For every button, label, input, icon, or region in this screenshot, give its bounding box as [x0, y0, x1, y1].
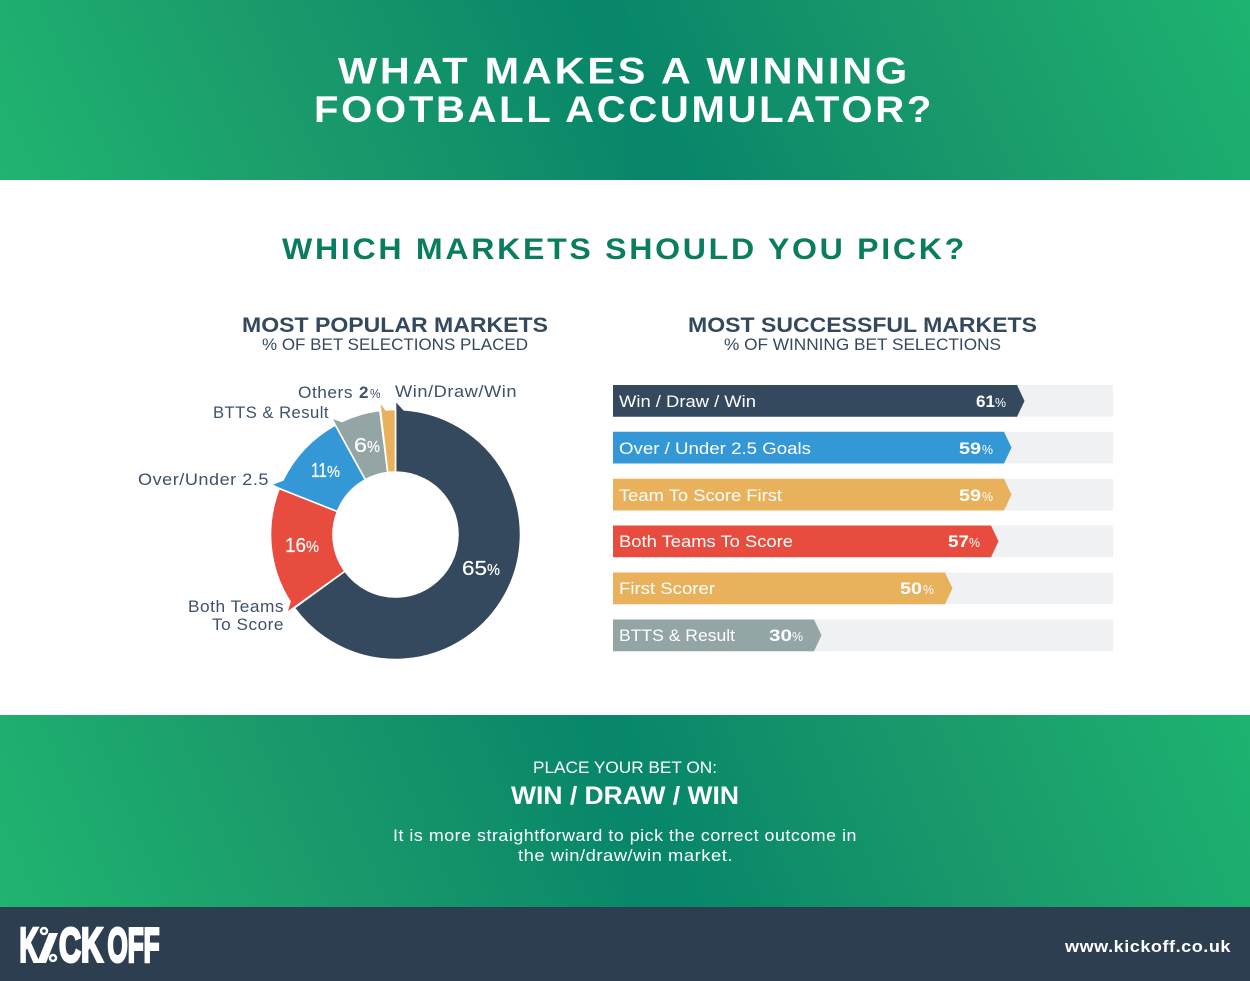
donut values: % — [306, 539, 319, 556]
donut heading — [242, 313, 548, 354]
bar: btts and result: 30 — [769, 626, 792, 645]
logo: K — [20, 920, 39, 972]
donut values: 16 — [285, 535, 306, 557]
bar: win draw win: % — [995, 395, 1006, 410]
bar: btts and result: % — [792, 629, 803, 644]
bars heading — [688, 313, 1037, 354]
recommendation text: PLACE YOUR BET ON: — [533, 758, 717, 777]
donut chart — [271, 400, 521, 660]
donut values: % — [487, 562, 500, 579]
bar: team to score first: % — [982, 489, 993, 504]
donut labels — [138, 382, 517, 634]
bar: first scorer: % — [923, 582, 934, 597]
recommendation text: It is more straightforward to pick the correct outcome in — [393, 826, 857, 845]
donut labels: Both Teams — [188, 597, 284, 616]
bars heading: MOST SUCCESSFUL MARKETS — [688, 313, 1037, 337]
bar: both teams to score: Both Teams To Score — [619, 532, 793, 551]
donut values: 65 — [462, 558, 487, 580]
bar: first scorer — [613, 572, 1113, 604]
donut labels: % — [370, 386, 381, 401]
bar: win draw win — [613, 385, 1113, 417]
donut heading: % OF BET SELECTIONS PLACED — [262, 335, 528, 354]
donut values: % — [367, 439, 380, 456]
website url: www.kickoff.co.uk — [1064, 937, 1231, 956]
title — [314, 50, 934, 130]
bar: both teams to score: 57 — [948, 532, 969, 551]
donut labels: To Score — [212, 615, 284, 634]
bar: over under: Over / Under 2.5 Goals — [619, 439, 811, 458]
bar: btts and result — [613, 620, 1113, 651]
header banner — [0, 0, 1250, 180]
panel: most successful markets — [613, 313, 1113, 651]
bar: over under: % — [982, 442, 993, 457]
donut labels: 2 — [359, 383, 369, 402]
bar: first scorer: First Scorer — [619, 579, 715, 598]
panel: most popular markets — [138, 313, 548, 660]
logo: OFF — [108, 920, 160, 972]
bar: team to score first — [613, 479, 1113, 510]
bar: team to score first: Team To Score First — [619, 486, 782, 505]
logo: CK — [59, 920, 103, 972]
donut labels: Win/Draw/Win — [395, 382, 517, 401]
bar: both teams to score — [613, 526, 1113, 557]
bar: first scorer: 50 — [900, 579, 922, 598]
donut values: % — [327, 464, 340, 481]
recommendation text: WIN / DRAW / WIN — [511, 782, 739, 810]
donut labels: Over/Under 2.5 — [138, 470, 269, 489]
donut values: 11 — [311, 460, 327, 482]
recommendation text: the win/draw/win market. — [518, 846, 733, 865]
logo — [20, 920, 160, 972]
recommendation banner — [0, 715, 1250, 907]
donut values: 6 — [354, 435, 367, 457]
footer bar — [0, 907, 1250, 981]
bar: win draw win: Win / Draw / Win — [619, 392, 756, 411]
donut heading: MOST POPULAR MARKETS — [242, 313, 548, 337]
bar: team to score first: 59 — [959, 486, 981, 505]
bar: over under — [613, 432, 1113, 464]
section heading: WHICH MARKETS SHOULD YOU PICK? — [282, 233, 967, 266]
recommendation text — [393, 758, 857, 865]
bars heading: % OF WINNING BET SELECTIONS — [724, 335, 1001, 354]
bar: over under: 59 — [959, 439, 981, 458]
title: FOOTBALL ACCUMULATOR? — [314, 89, 934, 130]
donut labels: BTTS & Result — [213, 403, 329, 422]
bar: both teams to score: % — [969, 535, 980, 550]
donut values — [285, 435, 500, 580]
bar: win draw win: 61 — [976, 392, 995, 411]
title: WHAT MAKES A WINNING — [338, 50, 910, 92]
bar: btts and result: BTTS & Result — [619, 626, 735, 645]
donut labels: Others — [298, 383, 353, 402]
